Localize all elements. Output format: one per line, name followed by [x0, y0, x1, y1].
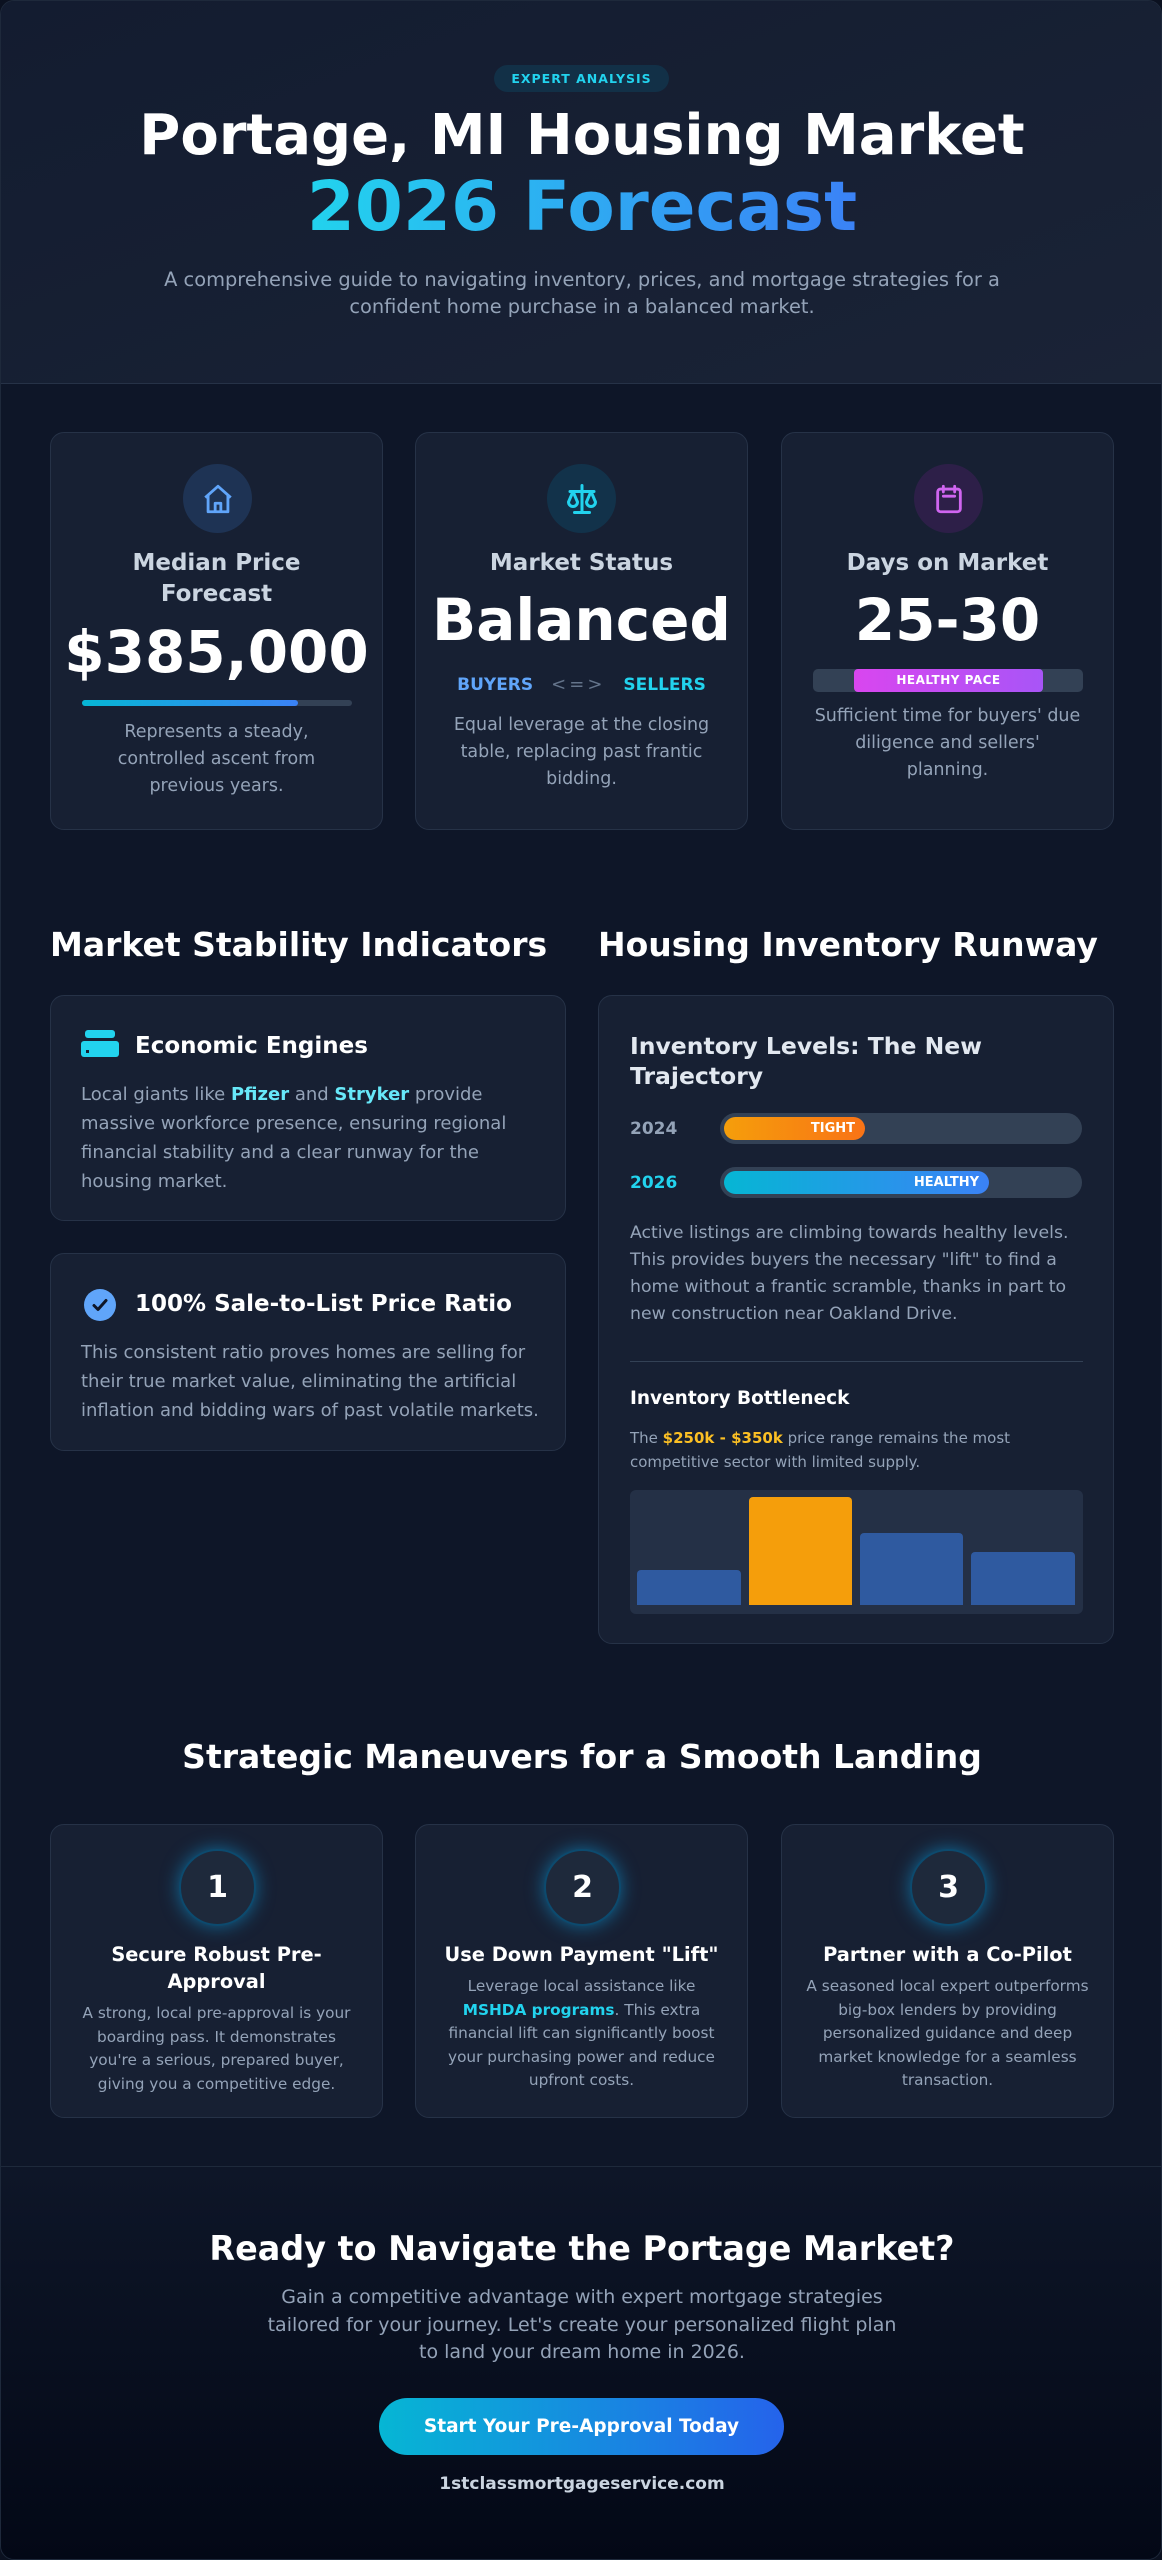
heading: housing inventory: Housing Inventory Runway [598, 925, 1098, 964]
panel: inventory [598, 995, 1114, 1644]
step title: Partner with a Co-Pilot [823, 1943, 1072, 1966]
subheading: bottleneck: Inventory Bottleneck [630, 1388, 849, 1409]
number badge [544, 1849, 621, 1926]
card: days on market [781, 432, 1114, 830]
text: The $250k - $350k price range remains the most competitive sector with limited supply. [630, 1429, 1010, 1471]
badge: expert analysis: EXPERT ANALYSIS [511, 71, 652, 86]
panel title: 100% Sale-to-List Price Ratio [135, 1291, 512, 1317]
text: This consistent ratio proves homes are selling for their true market value, eliminating the artificial inflation and bidding wars of past volatile markets. [81, 1342, 539, 1421]
big value: 25-30 [855, 586, 1040, 654]
bar: 2024 [630, 1113, 1082, 1144]
big value: $385,000 [64, 618, 369, 686]
card title: Market Status [490, 550, 673, 576]
step title [111, 1943, 322, 1993]
big value: Balanced [432, 586, 731, 654]
CTA text: Gain a competitive advantage with expert mortgage strategies tailored for your journey. Let's create your personalized flight plan to land your dream home in 2026. [268, 2286, 896, 2363]
healthy pace bar [813, 669, 1083, 692]
icon: calendar [914, 464, 983, 533]
description: Represents a steady, controlled ascent from previous years. [118, 722, 315, 796]
card: median price [50, 432, 383, 830]
subtitle heading: 2026 forecast: 2026 Forecast [307, 167, 857, 247]
panel: sale-to-list [50, 1253, 566, 1451]
number badge [179, 1849, 256, 1926]
step 2 [415, 1824, 748, 2118]
progress bar [82, 700, 352, 706]
bar: 2024: TIGHT [811, 1121, 855, 1136]
number badge: 1 [207, 1870, 228, 1905]
card title: Forecast [161, 581, 272, 607]
step 3 [781, 1824, 1114, 2118]
number badge: 2 [572, 1870, 593, 1905]
buyers sellers row: BUYERS <=> SELLERS [457, 674, 706, 695]
bar chart [630, 1490, 1083, 1614]
description: Sufficient time for buyers' due diligence and sellers' planning. [815, 706, 1080, 780]
badge: expert analysis [494, 65, 669, 92]
step title: Use Down Payment "Lift" [444, 1943, 718, 1966]
button [379, 2398, 784, 2455]
intro text: A comprehensive guide to navigating inventory, prices, and mortgage strategies for a confident home purchase in a balanced market. [164, 268, 1000, 318]
step 1 [50, 1824, 383, 2118]
icon: house [183, 464, 252, 533]
step title: Approval [167, 1970, 266, 1993]
bar: 2026 [630, 1167, 1082, 1198]
step text: A seasoned local expert outperforms big-box lenders by providing personalized guidance and deep market knowledge for a seamless transaction. [806, 1977, 1089, 2089]
card title: Days on Market [847, 550, 1048, 576]
card title [132, 550, 301, 607]
header section [1, 1, 1162, 384]
panel: economic engines [50, 995, 566, 1221]
icon: check badge [84, 1289, 116, 1321]
icon: scales [547, 464, 616, 533]
panel title: Economic Engines [135, 1033, 368, 1059]
heading: strategic maneuvers: Strategic Maneuvers for a Smooth Landing [182, 1737, 982, 1776]
panel title: Inventory Levels: The New Trajectory [630, 1032, 982, 1090]
healthy pace bar: HEALTHY PACE [896, 673, 1001, 687]
description: Equal leverage at the closing table, replacing past frantic bidding. [454, 715, 709, 789]
number badge: 3 [938, 1870, 959, 1905]
card title: Median Price [132, 550, 301, 576]
text: Local giants like Pfizer and Stryker provide massive workforce presence, ensuring regional financial stability and a clear runway for the housing market. [81, 1084, 506, 1192]
number badge [910, 1849, 987, 1926]
bar: 2024: 2024 [630, 1119, 677, 1139]
button: Start Your Pre-Approval Today [424, 2416, 739, 2437]
heading: market stability: Market Stability Indicators [50, 925, 547, 964]
bar: 2026: HEALTHY [914, 1175, 979, 1190]
step text: Leverage local assistance like MSHDA programs. This extra financial lift can significantly boost your purchasing power and reduce upfront costs. [448, 1977, 715, 2089]
step text: A strong, local pre-approval is your boarding pass. It demonstrates you're a serious, prepared buyer, giving you a competitive edge. [83, 2004, 350, 2092]
footer CTA section [1, 2166, 1162, 2560]
step title: Secure Robust Pre- [111, 1943, 322, 1966]
CTA heading: Ready to Navigate the Portage Market? [209, 2229, 955, 2268]
card: market status [415, 432, 748, 830]
title: Portage, MI Housing Market [139, 103, 1025, 168]
bar: 2026: 2026 [630, 1173, 677, 1193]
website url: 1stclassmortgageservice.com [439, 2474, 725, 2494]
icon: briefcase [81, 1030, 119, 1057]
text: Active listings are climbing towards healthy levels. This provides buyers the necessary "lift" to find a home without a frantic scramble, thanks in part to new construction near Oakland Drive. [630, 1223, 1068, 1324]
